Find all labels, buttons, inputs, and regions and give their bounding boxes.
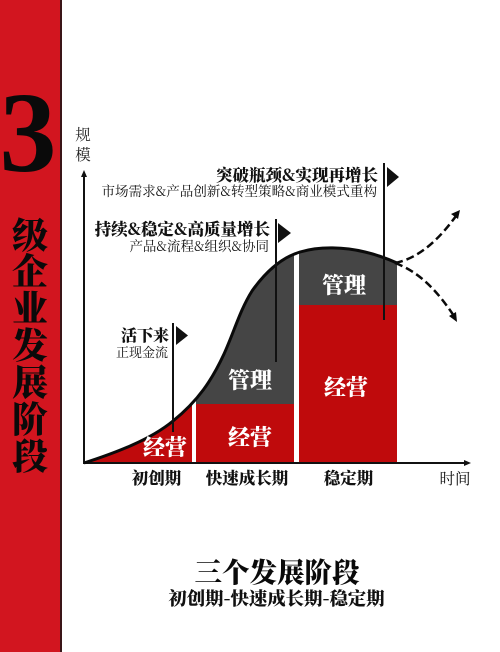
label: breakthrough: 市场需求&产品创新&转型策略&商业模式重构: [101, 180, 377, 200]
area labels: 管理: [228, 364, 272, 395]
area labels: 经营: [228, 421, 272, 452]
panel: red sidebar: [0, 0, 62, 652]
sidebar title: 段: [12, 429, 48, 480]
stage labels: [132, 465, 471, 489]
area labels: 管理: [322, 269, 366, 300]
area: stage blocks: [84, 240, 397, 463]
stage labels: 稳定期: [324, 465, 374, 489]
area labels: [143, 269, 368, 462]
sidebar title: 发: [12, 318, 48, 369]
label: sustain: [95, 216, 270, 255]
area labels: 经营: [324, 371, 368, 402]
label: sustain: 产品&流程&组织&协同: [129, 235, 269, 255]
flag: breakthrough: [383, 163, 399, 320]
area labels: 经营: [143, 431, 187, 462]
sidebar title: 业: [12, 281, 48, 332]
label: survive: 正现金流: [116, 342, 168, 361]
arrow: dashed upward scenario: [395, 210, 460, 263]
axis: time: [84, 460, 471, 466]
axis: scale: [81, 170, 87, 464]
arrow: dashed downward scenario: [395, 263, 457, 322]
label: survive: [116, 323, 169, 361]
chart: growth curve: [81, 163, 471, 466]
stage labels: 快速成长期: [206, 465, 289, 489]
label: survive: 活下来: [121, 323, 169, 346]
sidebar title: 企: [12, 244, 48, 295]
sidebar title: [12, 208, 48, 480]
flag: survive: [172, 323, 188, 432]
sidebar title: 级: [12, 208, 48, 259]
label: breakthrough: 突破瓶颈&实现再增长: [216, 162, 378, 186]
label: y axis: 模: [75, 143, 91, 165]
label: sustain: 持续&稳定&高质量增长: [95, 216, 270, 240]
bottom subheading: 初创期-快速成长期-稳定期: [168, 585, 385, 611]
label: breakthrough: [101, 162, 378, 200]
sidebar title: 展: [12, 355, 48, 406]
label: y axis: [75, 123, 91, 165]
stage labels: 初创期: [132, 465, 182, 489]
stage labels: 时间: [439, 467, 471, 489]
flag: sustain: [275, 219, 291, 362]
sidebar title: 阶: [12, 392, 48, 443]
big number 3: 3: [0, 69, 56, 196]
curve line: [84, 248, 397, 463]
label: y axis: 规: [75, 123, 91, 145]
bottom heading: 三个发展阶段: [194, 550, 360, 590]
